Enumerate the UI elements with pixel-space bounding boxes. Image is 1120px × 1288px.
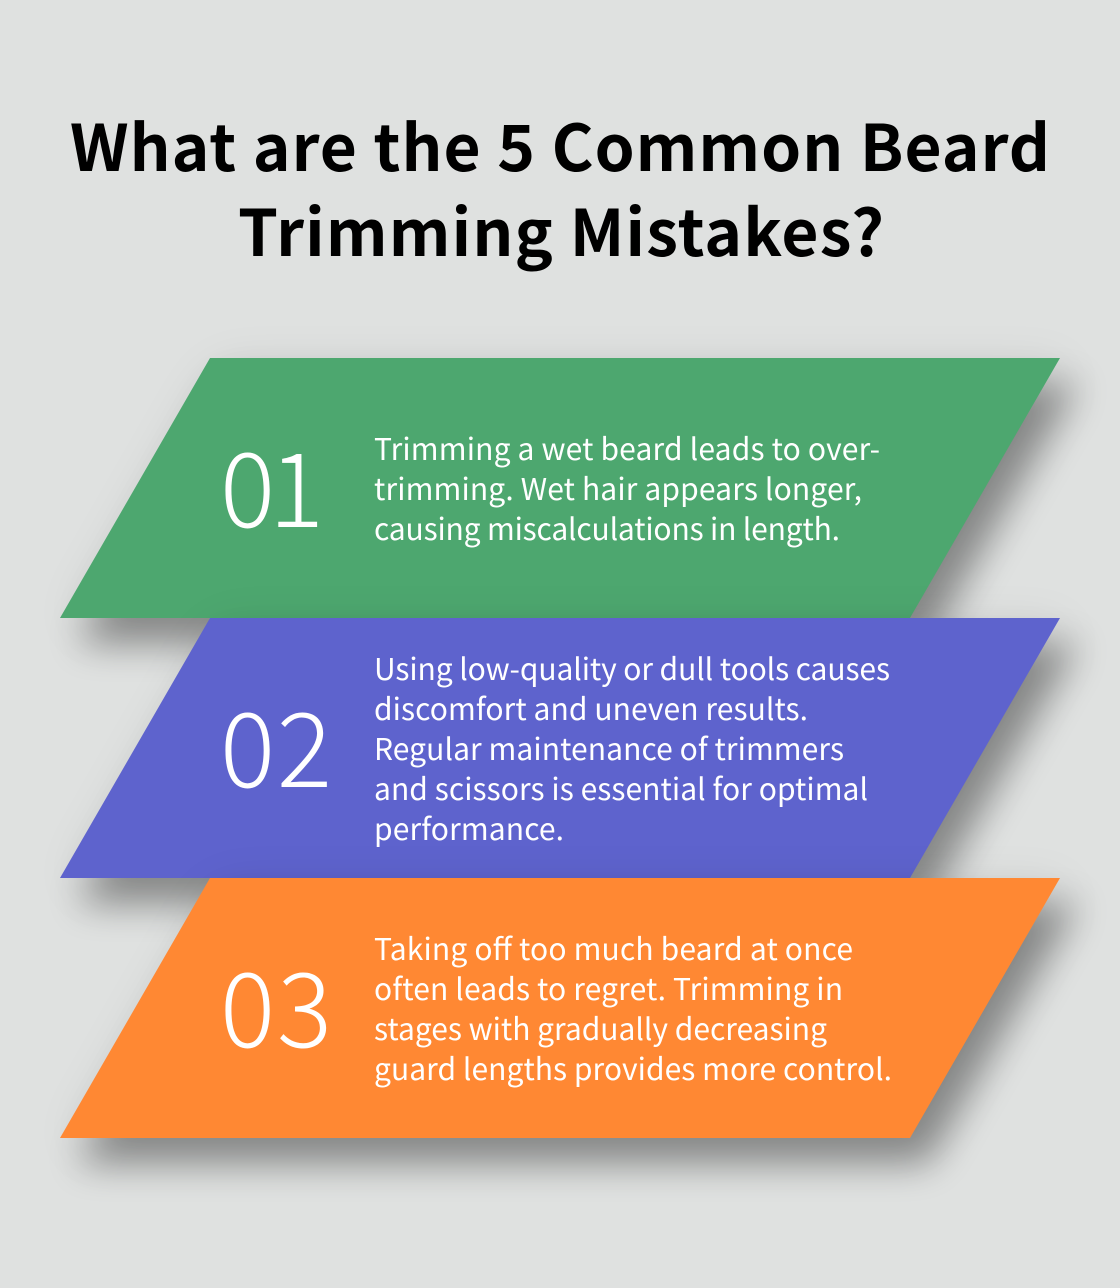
text block: mistake 03: Taking off too much beard at once <box>374 925 853 969</box>
parallelogram: purple <box>60 618 1060 878</box>
text block: mistake 03: often leads to regret. Trimming in <box>374 965 843 1009</box>
title: Trimming Mistakes? <box>238 183 884 275</box>
text block: mistake 02 <box>374 645 890 849</box>
text block: mistake 02: Using low-quality or dull tools causes <box>374 645 890 689</box>
text block: mistake 02: performance. <box>374 805 564 849</box>
number 03: 03 <box>220 928 332 1077</box>
number 01: 01 <box>220 408 324 557</box>
text block: mistake 01: causing miscalculations in length. <box>374 505 840 549</box>
panel: mistake 02 <box>60 618 1060 878</box>
parallelogram: green <box>60 358 1060 618</box>
text block: mistake 02: discomfort and uneven results. <box>374 685 808 729</box>
title <box>70 98 1050 275</box>
text block: mistake 03 <box>374 925 892 1089</box>
panel: mistake 03 <box>60 878 1060 1138</box>
panel: mistake 01 <box>60 358 1060 618</box>
text block: mistake 01 <box>374 425 880 549</box>
number 02: 02 <box>220 668 332 817</box>
text block: mistake 03: stages with gradually decreasing <box>374 1005 827 1049</box>
text block: mistake 01: trimming. Wet hair appears longer, <box>374 465 862 509</box>
text block: mistake 02: Regular maintenance of trimmers <box>374 725 844 769</box>
title: What are the 5 Common Beard <box>70 98 1050 190</box>
text block: mistake 02: and scissors is essential for optimal <box>374 765 868 809</box>
parallelogram: orange <box>60 878 1060 1138</box>
text block: mistake 03: guard lengths provides more control. <box>374 1045 892 1089</box>
text block: mistake 01: Trimming a wet beard leads to over- <box>374 425 880 469</box>
